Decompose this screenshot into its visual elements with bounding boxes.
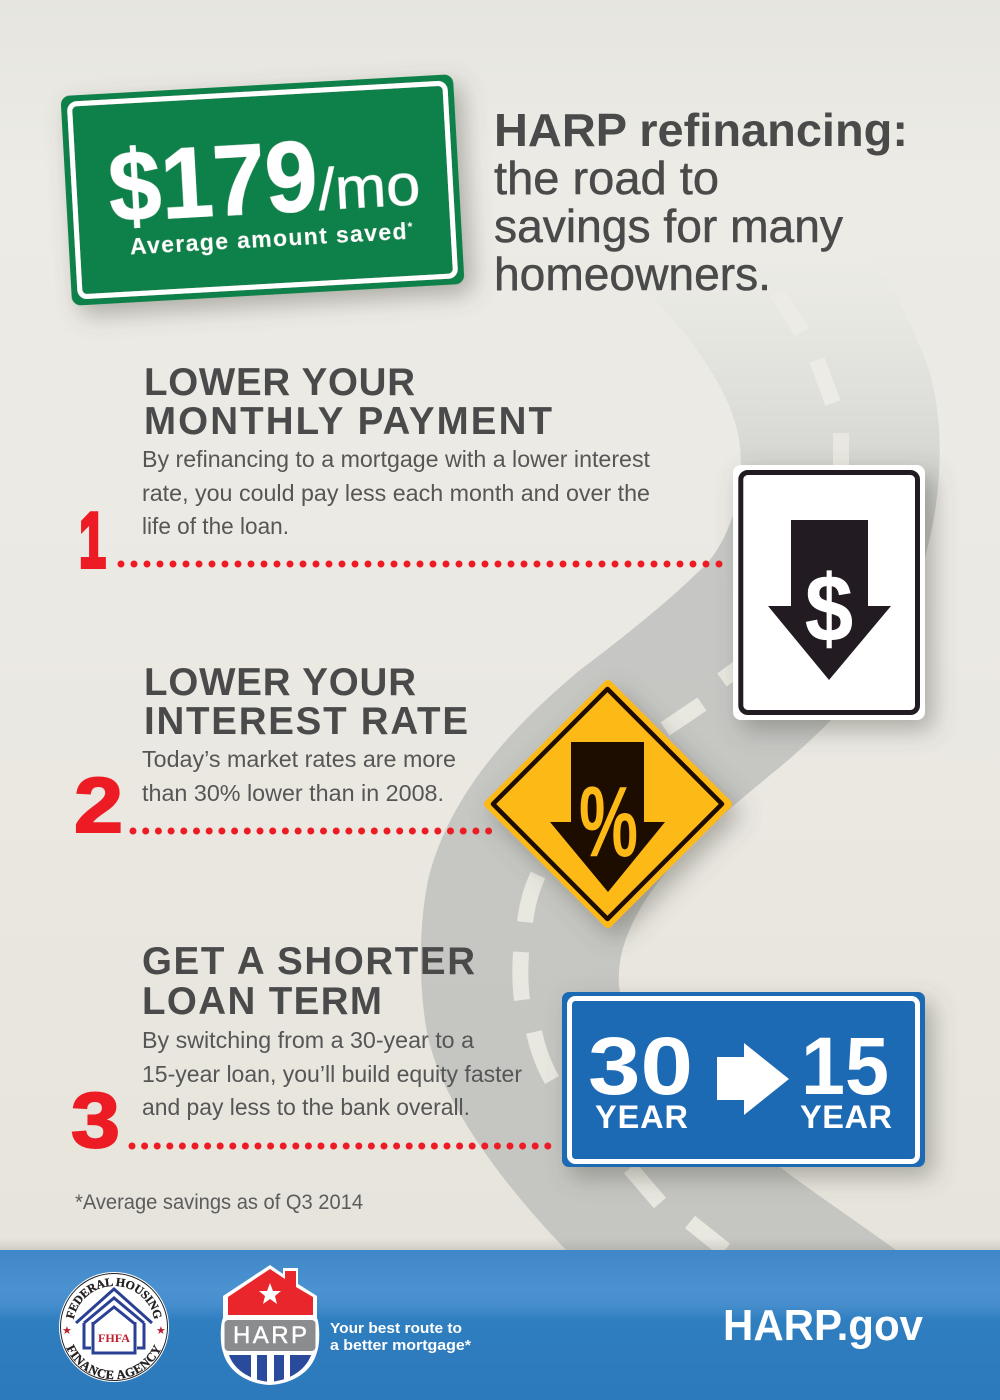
seal lettering xyxy=(66,1278,162,1380)
step 1 dotted leader xyxy=(121,560,722,568)
white dollar sign xyxy=(733,465,925,720)
winding road xyxy=(421,255,940,1250)
footnote: *Average savings as of Q3 2014 xyxy=(75,1191,363,1214)
title: homeowners. xyxy=(494,248,771,300)
seal stars: ★ xyxy=(156,1325,166,1337)
gray name band xyxy=(224,1320,316,1351)
step 3 body: and pay less to the bank overall. xyxy=(142,1094,470,1120)
down arrow xyxy=(550,742,665,892)
percent symbol: % xyxy=(579,766,638,878)
savings caption: * xyxy=(407,220,413,234)
step 2 number: 2 xyxy=(74,761,123,849)
blue term sign xyxy=(562,992,925,1167)
step 1 heading xyxy=(144,361,552,443)
step 1 body: rate, you could pay less each month and over the xyxy=(142,480,650,506)
step 2 body: than 30% lower than in 2008. xyxy=(142,780,444,806)
step 2 heading: INTEREST RATE xyxy=(144,700,468,743)
step 3 heading xyxy=(142,940,475,1023)
red roof xyxy=(228,1269,313,1315)
step 3 body: 15-year loan, you’ll build equity faster xyxy=(142,1061,522,1087)
step 1: lower monthly payment xyxy=(79,361,722,584)
step 2: lower interest rate xyxy=(74,661,492,849)
title: the road to xyxy=(494,152,719,204)
15 year label: YEAR xyxy=(800,1099,892,1135)
per month label: /mo xyxy=(316,152,422,223)
green savings sign xyxy=(60,74,465,306)
savings amount: $179 xyxy=(105,120,320,243)
website address: HARP.gov xyxy=(723,1301,924,1350)
title xyxy=(494,104,908,300)
FHFA seal xyxy=(59,1272,169,1382)
footer band xyxy=(0,1238,1000,1250)
step 3 number: 3 xyxy=(71,1076,120,1164)
title: HARP refinancing: xyxy=(494,104,908,156)
step 1 heading: LOWER YOUR xyxy=(144,361,415,404)
step 2 body: Today’s market rates are more xyxy=(142,746,456,772)
step 3 body xyxy=(142,1027,522,1120)
step 3 heading: GET A SHORTER xyxy=(142,940,475,983)
seal lettering: FINANCE AGENCY xyxy=(66,1344,161,1380)
yellow percent sign xyxy=(488,684,728,924)
30 year label xyxy=(588,1021,693,1135)
step 1 heading: MONTHLY PAYMENT xyxy=(144,400,552,443)
title: savings for many xyxy=(494,200,843,252)
step 2 heading: LOWER YOUR xyxy=(144,661,416,704)
15 year label: 15 xyxy=(801,1021,889,1112)
30 year label: 30 xyxy=(588,1021,693,1112)
step 2 dotted leader xyxy=(133,828,492,834)
FHFA initials: FHFA xyxy=(98,1333,131,1345)
step 2 heading xyxy=(144,661,468,743)
step 3 heading: LOAN TERM xyxy=(142,980,382,1023)
step 1 body: By refinancing to a mortgage with a lower interest xyxy=(142,446,650,472)
footer tagline: a better mortgage* xyxy=(330,1337,471,1354)
step 1 body xyxy=(142,446,650,539)
seal house xyxy=(76,1289,152,1353)
step 1 number: 1 xyxy=(79,496,106,584)
step 2 body xyxy=(142,746,456,806)
footer tagline xyxy=(330,1320,471,1354)
blue stripes xyxy=(229,1355,312,1382)
seal stars xyxy=(62,1325,166,1337)
step 3 dotted leader xyxy=(132,1142,552,1150)
HARP wordmark: HARP xyxy=(233,1322,307,1349)
HARP shield logo xyxy=(221,1265,319,1385)
right arrow xyxy=(717,1043,789,1115)
dollar symbol: $ xyxy=(805,556,853,662)
30 year label: YEAR xyxy=(595,1099,688,1135)
footer tagline: Your best route to xyxy=(330,1320,462,1337)
seal lettering: FEDERAL HOUSING xyxy=(66,1278,162,1320)
down arrow xyxy=(768,520,891,680)
step 3: shorter loan term xyxy=(71,940,552,1164)
step 3 body: By switching from a 30-year to a xyxy=(142,1027,475,1053)
seal stars: ★ xyxy=(62,1325,72,1337)
star xyxy=(259,1283,281,1304)
savings caption: Average amount saved xyxy=(129,218,407,259)
step 1 body: life of the loan. xyxy=(142,513,289,539)
